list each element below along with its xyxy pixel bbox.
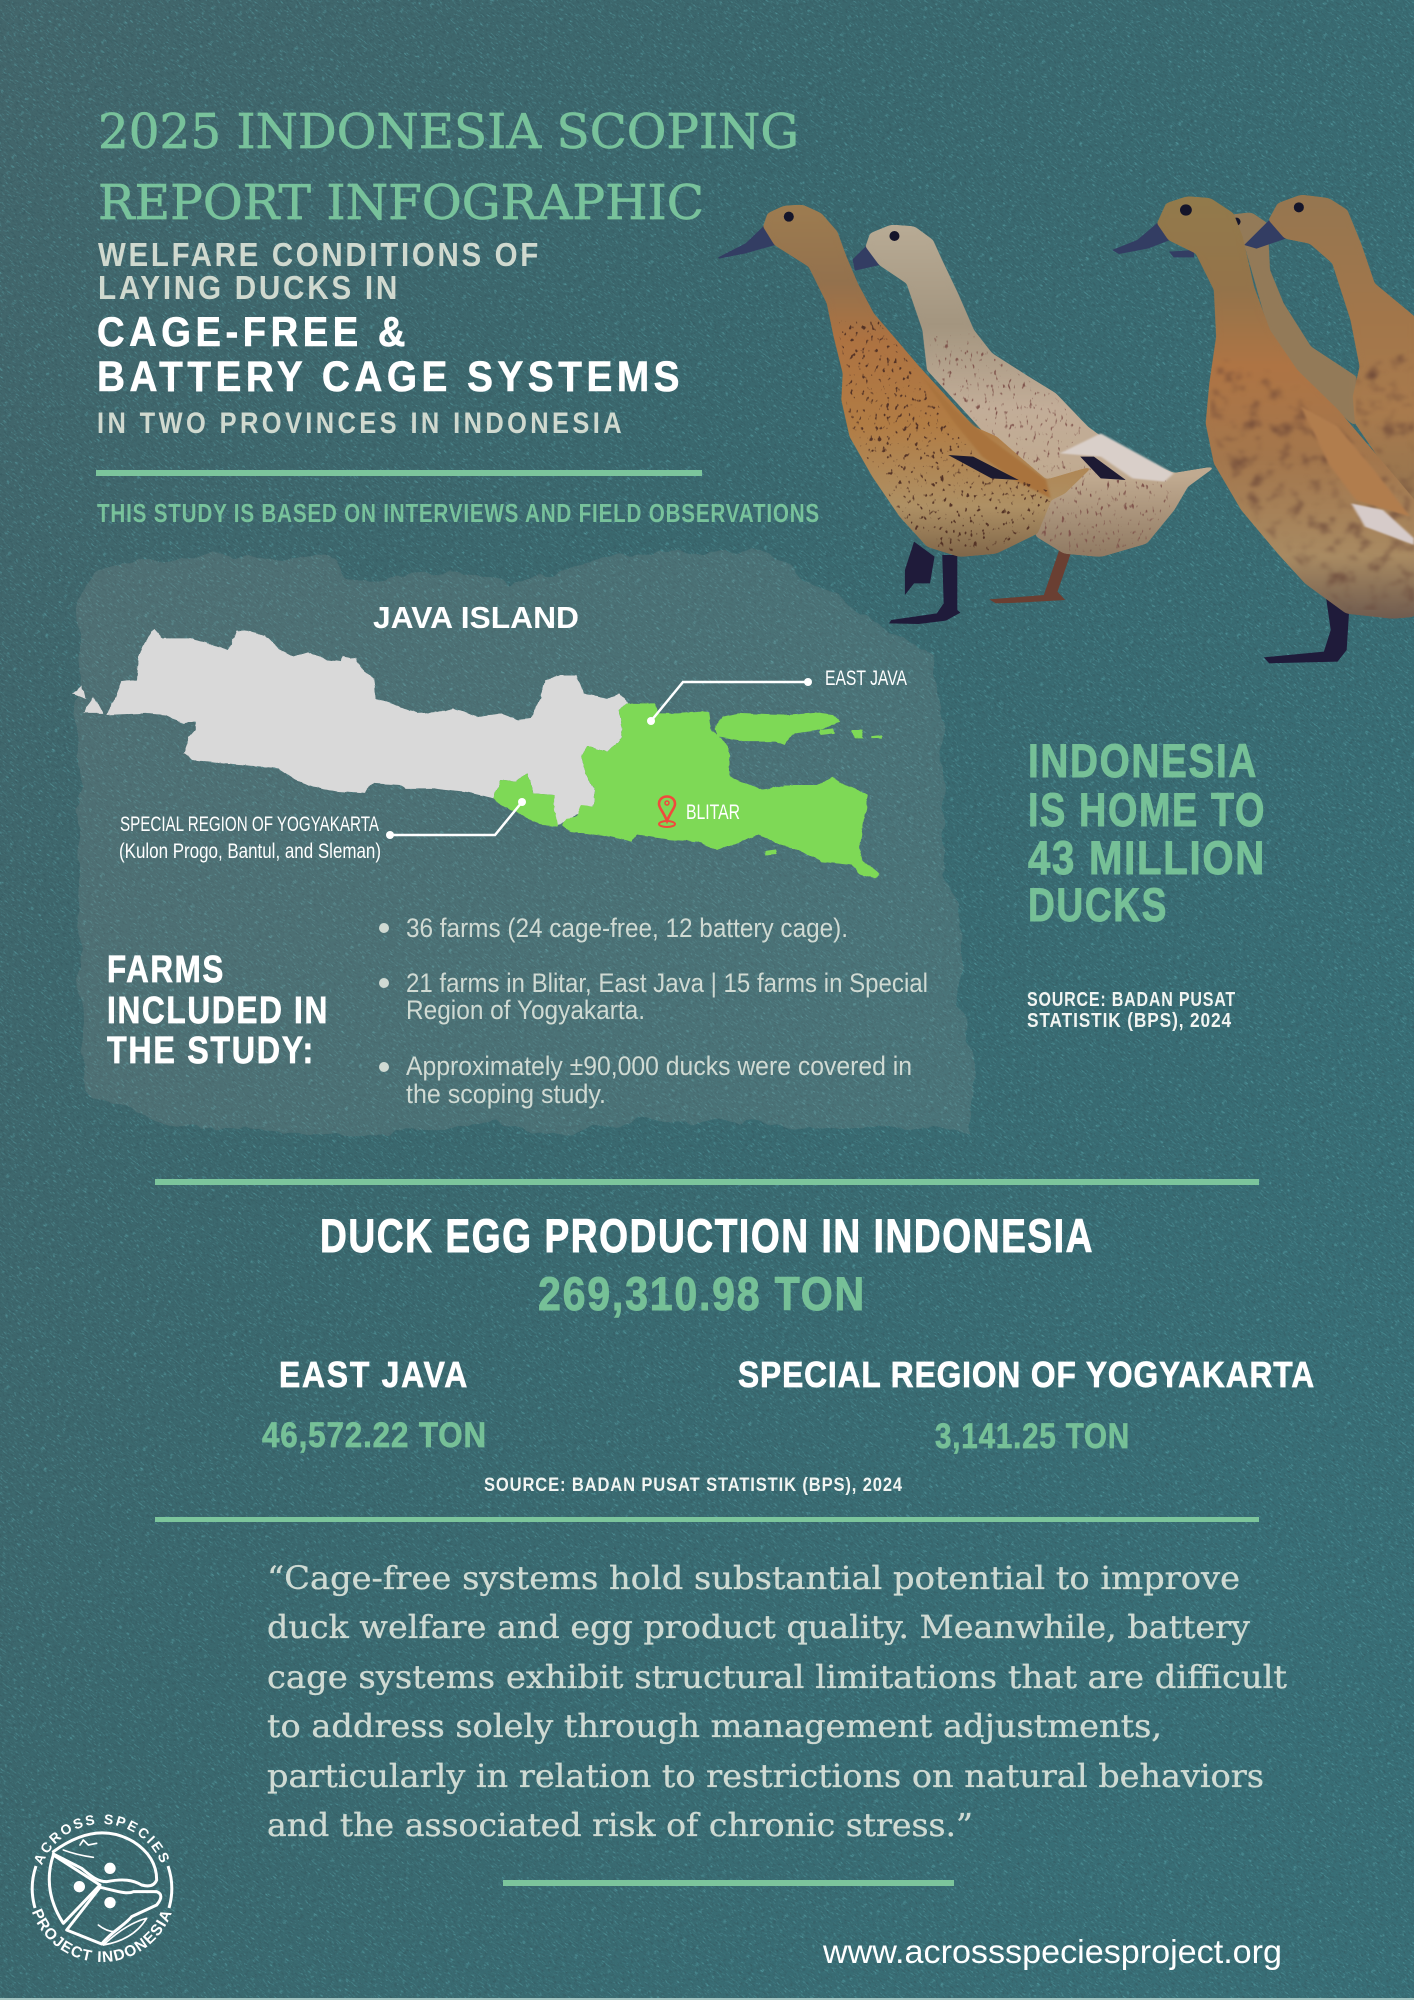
divider below egg production xyxy=(155,1517,1259,1522)
stat: Special Region of Yogyakarta: SPECIAL REGION OF YOGYAKARTA xyxy=(738,1354,1315,1395)
subtitle: WELFARE CONDITIONS OF xyxy=(98,236,541,273)
bullet 2: 21 farms in Blitar, East Java | 15 farms in Special xyxy=(406,968,928,998)
East Java in green xyxy=(561,703,881,878)
stat: East Java: 46,572.22 TON xyxy=(262,1416,487,1455)
illustration: runner ducks xyxy=(718,195,1414,663)
quote: duck welfare and egg product quality. Meanwhile, battery xyxy=(267,1608,1250,1646)
map: Java island xyxy=(73,628,881,878)
stat: Special Region of Yogyakarta xyxy=(738,1354,1315,1456)
source note: ducks: SOURCE: BADAN PUSAT xyxy=(1027,989,1236,1011)
bullet 3 xyxy=(379,1051,912,1109)
stat: Special Region of Yogyakarta: 3,141.25 TON xyxy=(935,1417,1130,1456)
stat: East Java: EAST JAVA xyxy=(279,1354,469,1395)
heading: farms included in the study: INCLUDED IN xyxy=(107,990,329,1032)
bullet 3: Approximately ±90,000 ducks were covered in xyxy=(406,1051,912,1081)
logo: Across Species Project Indonesia: ACROSS SPECIES xyxy=(34,1814,169,1866)
heading: Java Island: JAVA ISLAND xyxy=(373,600,579,635)
logo: Across Species Project Indonesia: PROJECT INDONESIA xyxy=(32,1908,172,1962)
stat: national production: 269,310.98 TON xyxy=(538,1267,866,1320)
divider under subtitle xyxy=(96,470,702,476)
subtitle: IN TWO PROVINCES IN INDONESIA xyxy=(97,407,625,440)
subtitle xyxy=(97,236,684,440)
source note: ducks: STATISTIK (BPS), 2024 xyxy=(1027,1010,1232,1032)
subtitle: BATTERY CAGE SYSTEMS xyxy=(97,353,684,401)
duck 3 front xyxy=(1112,197,1414,663)
duck 4 rear xyxy=(1169,213,1356,427)
callout: Special Region of Yogyakarta leader: (Kulon Progo, Bantul, and Sleman) xyxy=(119,840,381,863)
bullet 3: the scoping study. xyxy=(406,1079,606,1109)
callout: East Java leader: EAST JAVA xyxy=(825,667,907,690)
bullet 1: 36 farms (24 cage-free, 12 battery cage). xyxy=(406,913,848,943)
divider under quote xyxy=(503,1880,954,1886)
Special Region of Yogyakarta in green xyxy=(494,773,558,827)
callout: 43 million ducks: DUCKS xyxy=(1028,878,1168,931)
source note: egg production: SOURCE: BADAN PUSAT STATISTIK (BPS), 2024 xyxy=(484,1475,903,1496)
subtitle: LAYING DUCKS IN xyxy=(98,269,400,306)
icon: Blitar location pin: BLITAR xyxy=(686,801,740,824)
quote xyxy=(267,1559,1287,1844)
list: farm facts xyxy=(379,913,928,1109)
callout: 43 million ducks: IS HOME TO xyxy=(1028,783,1266,836)
callout: 43 million ducks xyxy=(1028,734,1266,931)
callout: 43 million ducks: 43 MILLION xyxy=(1028,831,1266,884)
quote: to address solely through management adjustments, xyxy=(267,1707,1162,1745)
duck 2 pale xyxy=(853,225,1215,603)
callout: 43 million ducks: INDONESIA xyxy=(1028,734,1258,787)
source note: ducks xyxy=(1027,989,1236,1032)
website: www.acrossspeciesproject.org xyxy=(822,1933,1282,1970)
panel: Java map and farms backdrop xyxy=(78,550,975,1135)
heading: duck egg production: DUCK EGG PRODUCTION IN INDONESIA xyxy=(320,1209,1094,1262)
title: REPORT INFOGRAPHIC xyxy=(98,175,704,231)
subtitle: CAGE-FREE & xyxy=(97,308,410,355)
divider above egg production xyxy=(155,1179,1259,1185)
heading: farms included in the study xyxy=(107,949,329,1072)
heading: farms included in the study: FARMS xyxy=(107,949,225,991)
logo: Across Species Project Indonesia xyxy=(30,1814,174,1962)
title: 2025 INDONESIA SCOPING xyxy=(98,104,799,160)
quote: and the associated risk of chronic stress.” xyxy=(267,1806,973,1844)
bullet 2: Region of Yogyakarta. xyxy=(406,995,645,1025)
callout: Special Region of Yogyakarta leader xyxy=(119,798,526,863)
stat: East Java xyxy=(262,1354,487,1455)
west and central Java in grey xyxy=(73,628,628,827)
heading: farms included in the study: THE STUDY: xyxy=(107,1030,315,1072)
duck 5 right xyxy=(1244,195,1414,507)
quote: particularly in relation to restrictions on natural behaviors xyxy=(267,1757,1264,1795)
callout: East Java leader xyxy=(647,667,907,725)
duck 1 brown xyxy=(718,205,1092,624)
title xyxy=(98,104,799,231)
bullet 2 xyxy=(379,968,928,1025)
callout: Special Region of Yogyakarta leader: SPECIAL REGION OF YOGYAKARTA xyxy=(120,813,379,836)
quote: “Cage-free systems hold substantial potential to improve xyxy=(267,1559,1240,1597)
icon: Blitar location pin xyxy=(659,796,740,827)
quote: cage systems exhibit structural limitations that are difficult xyxy=(267,1658,1287,1696)
study basis note: THIS STUDY IS BASED ON INTERVIEWS AND FIELD OBSERVATIONS xyxy=(97,498,820,528)
